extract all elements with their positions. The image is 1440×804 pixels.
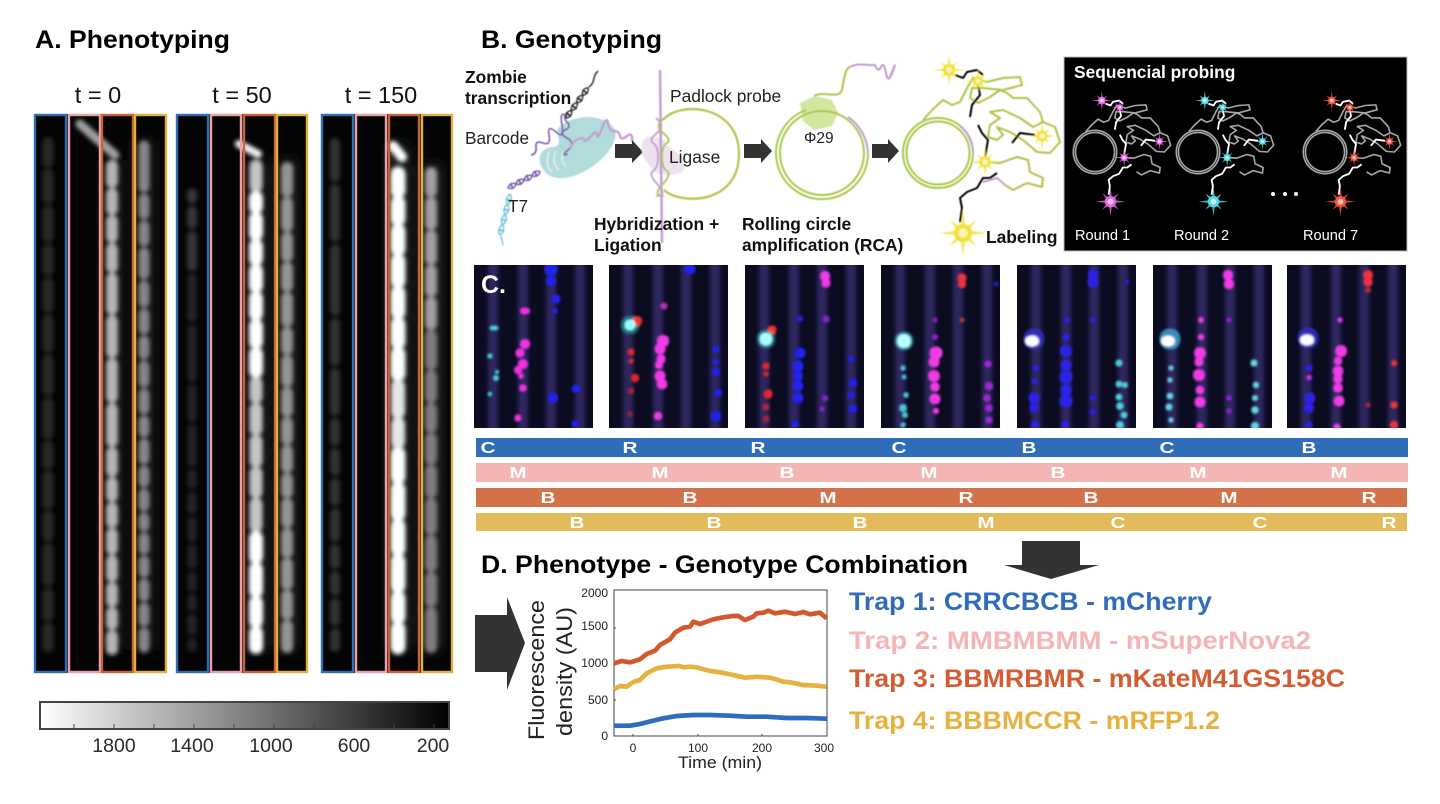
barcode bar: trap 4 yellow [476,513,1407,532]
label: Ligase: Ligase [669,147,720,167]
barcode bar: trap 3 orange: R [958,490,974,507]
chart y-axis title second line: density (AU) [552,607,577,736]
colour bar: grayscale intensity scale [40,702,449,757]
colour bar: grayscale intensity scale: 1000 [249,735,293,757]
label: Zombie transcription: transcription [465,88,571,108]
barcode bar: trap 4 yellow: C [1252,515,1268,532]
panel C: sequencing image round 7 [1287,260,1406,435]
barcode bar: trap 2 pink: M [1330,465,1348,482]
diagram: hybridization and ligation [642,70,739,243]
trap 2: Trap 2: MMBMBMM - mSuperNova2 [849,627,1311,655]
chart y-axis title: Fluorescence [524,600,549,740]
barcode bar: trap 4 yellow: B [570,515,584,532]
label: Padlock probe: Padlock probe [670,86,781,106]
diagram: labeling [903,54,1060,257]
barcode bar: trap 1 blue: C [1160,440,1175,457]
x tick labels: 100 [688,741,708,755]
barcode bar: trap 1 blue: B [1302,440,1316,457]
x tick labels: 200 [752,741,772,755]
heading: t = 150: t = 150 [345,82,417,108]
heading: t = 0: t = 0 [75,82,121,108]
barcode bar: trap 4 yellow: R [1382,515,1397,532]
y tick labels: 0 [601,729,608,743]
heading: t = 50: t = 50 [212,82,272,108]
barcode bar: trap 1 blue: R [622,440,638,457]
heading: D. Phenotype - Genotype Combination: D. Phenotype - Genotype Combination [481,551,968,579]
round labels [1075,228,1358,244]
barcode bar: trap 2 pink: M [920,465,938,482]
barcode bar: trap 2 pink: M [1190,465,1206,482]
barcode bar: trap 3 orange [476,488,1407,507]
data lines [614,611,827,726]
diagram: rolling circle amplification [776,64,895,199]
panel: sequencial probing [1064,57,1407,251]
trap 3: Trap 3: BBMRBMR - mKateM41GS158C [849,665,1345,693]
round 1 probing [1073,91,1171,216]
barcode bar: trap 1 blue: C [480,440,496,457]
round labels: Round 1 [1075,228,1130,244]
barcode bar: trap 3 orange: B [1084,490,1098,507]
panel C: sequencing image round 1 [474,260,593,435]
barcode bar: trap 4 yellow: M [978,515,994,532]
trap 1: Trap 1: CRRCBCB - mCherry [849,588,1212,616]
label: Hybridization + Ligation: Hybridization + [594,214,719,234]
colour bar: grayscale intensity scale: 1400 [170,735,214,757]
barcode bar: trap 2 pink: M [652,465,668,482]
y tick labels [581,586,608,743]
panel C: sequencing image round 2 [609,260,728,435]
panel: phenotype traps at t = 50 [176,114,307,673]
barcode bar: trap 1 blue: C [892,440,907,457]
panel: phenotype traps at t = 150 [321,114,452,673]
x tick labels [630,741,834,755]
label: Barcode: Barcode [465,128,529,148]
barcode bar: trap 2 pink: B [1050,465,1066,482]
colour bar: grayscale intensity scale: 1800 [92,735,136,757]
label: Rolling circle amplification (RCA): Rolling circle [742,214,852,234]
barcode bar: trap 1 blue: B [1022,440,1036,457]
round labels: Round 2 [1174,228,1229,244]
arrow: transcription to ligation [615,140,643,163]
arrow: RCA to labeling [872,139,899,163]
panel C: sequencing image round 5 [1017,260,1136,435]
panel C: sequencing image round 3 [745,260,864,435]
barcode bar: trap 2 pink [476,463,1408,482]
heading: A. Phenotyping: A. Phenotyping [35,26,230,54]
label: C.: C. [481,271,506,299]
barcode bar: trap 4 yellow: B [706,515,722,532]
y tick labels: 500 [588,693,608,707]
panel C: sequencing image round 6 [1153,260,1272,435]
trap 4: Trap 4: BBBMCCR - mRFP1.2 [849,707,1220,735]
barcode bar: trap 1 blue: R [750,440,766,457]
label: Zombie transcription: Zombie [465,67,527,87]
panel: phenotype traps at t = 0 [34,114,166,673]
y tick labels: 1500 [581,619,608,633]
x tick labels: 300 [814,741,834,755]
barcode bar: trap 3 orange: R [1362,490,1377,507]
y tick labels: 2000 [581,586,608,600]
ellipsis dots [1273,192,1296,196]
round 7 probing [1303,91,1401,216]
barcode bar: trap 4 yellow: C [1110,515,1126,532]
arrow: ligation to RCA [744,139,772,163]
barcode bar: trap 3 orange: M [1220,490,1238,507]
arrow: down to trap list [1004,541,1099,579]
barcode bar: trap 2 pink: M [510,465,526,482]
barcode bar: trap 1 blue [476,438,1408,457]
barcode bar: trap 3 orange: B [540,490,556,507]
trap legend list [849,588,1345,735]
barcode bar: trap 3 orange: B [682,490,698,507]
barcode bar: trap 2 pink: B [780,465,794,482]
label: Rolling circle amplification (RCA): amplification (RCA) [742,235,903,255]
colour bar: grayscale intensity scale: 600 [338,735,370,757]
chart frame and ticks [614,590,827,736]
barcode bar: trap 3 orange: M [820,490,836,507]
y tick labels: 1000 [581,656,608,670]
round 2 probing [1176,91,1274,216]
heading: Sequencial probing: Sequencial probing [1074,62,1235,82]
barcode bar: trap 4 yellow: B [852,515,868,532]
label: Hybridization + Ligation: Ligation [594,235,662,255]
label: Labeling: Labeling [986,227,1058,247]
label: T7: T7 [508,196,528,216]
colour bar: grayscale intensity scale: 200 [417,735,449,757]
diagram: zombie transcription [497,71,632,245]
x tick labels: 0 [630,741,637,755]
round labels: Round 7 [1303,228,1358,244]
heading: B. Genotyping: B. Genotyping [481,26,662,54]
chart x-axis title: Time (min) [678,753,762,772]
chart: fluorescence density over time [524,586,834,772]
label: phi29: Φ29 [804,130,834,147]
panel C: sequencing image round 4 [881,260,1000,435]
arrow: right to chart [475,597,525,690]
